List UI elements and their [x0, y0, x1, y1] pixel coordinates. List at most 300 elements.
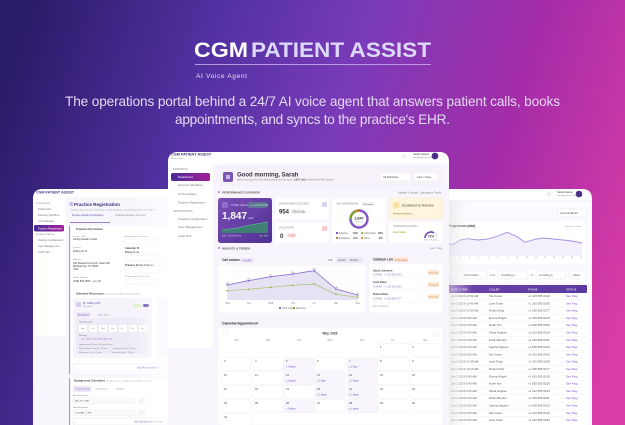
section: practice information: 100 Medical Center Dr, Suite 200 [73, 262, 110, 265]
calendar: appointments: 25 [255, 401, 259, 405]
calendar: appointments: 13 [317, 373, 321, 377]
section: background schedule: Set your hours, regulatory and holiday schedule [106, 380, 153, 382]
line chart: call progression: 5 [469, 257, 471, 259]
sidebar [168, 164, 213, 348]
calendar: appointments: Wed [327, 339, 333, 342]
section: schedule resources: Wed [101, 328, 105, 330]
heading: performance overview [218, 190, 442, 194]
card: total calls: calls [248, 216, 254, 220]
card: callback list: Escalated [429, 272, 439, 274]
table: call log: Jun 2 2026 8:55 AM [451, 404, 477, 408]
calendar: appointments: 6 [317, 359, 319, 363]
table: call log: +1 206 555 0177 [528, 309, 550, 313]
table: call log: STATUS [566, 288, 576, 292]
calendar: appointments: 31 [224, 415, 228, 419]
sidebar: Discover Workflow [178, 183, 204, 187]
card: callback list: Sarah Johnson [373, 268, 393, 272]
line chart: call progression: 12 [535, 257, 538, 259]
card: escalated to humans: Review transfers → [393, 212, 415, 216]
table: call log: Jun 3 2026 9:15 AM [451, 345, 477, 349]
section: schedule resources: Thu [111, 328, 114, 330]
card: callback list [369, 254, 443, 313]
card: appointments booked: 954 [279, 210, 290, 216]
line chart: call progression: 16 [571, 257, 574, 259]
section: schedule resources: Dr. Jeffrey M.D. [83, 301, 101, 305]
line chart: call volume: 274 [246, 279, 251, 281]
table: call log: Robert Diaz [489, 367, 505, 371]
table: call log: +1 628 555 0156 [528, 323, 550, 327]
table: call log: Olivia Hughes [489, 330, 508, 334]
calendar: appointments: 10 [224, 373, 228, 377]
line chart: call volume: 248 [225, 283, 230, 285]
calendar: appointments: 11 [255, 373, 258, 377]
calendar: appointments: ● 2 Appt [349, 366, 358, 368]
table: call log: See Msg [566, 338, 578, 342]
card: appointments booked [275, 198, 329, 219]
line chart: call volume: Sun [356, 302, 361, 305]
table: call log: Jun 2 2026 9:40 AM [451, 382, 477, 386]
page heading: Configure your practice registration, voicemail options and routing for the AI Voice Agent. [70, 208, 156, 212]
section: background schedule: 10:00 AM - 1 PM [75, 412, 91, 414]
section: schedule resources: Working Days [79, 320, 93, 324]
section: practice information: (248) 555-0847 · ext. 10 [73, 279, 101, 283]
title: CGM [194, 39, 248, 62]
line chart: call volume: Call volume [222, 258, 240, 262]
table: call log: See Msg [566, 389, 578, 393]
card: callback list: Liam Patel [373, 280, 387, 284]
calendar: appointments: Sat [423, 339, 427, 342]
calendar: appointments: 19 [286, 387, 290, 391]
donut chart: call outcomes: Information [364, 232, 377, 235]
description: appointments, and syncs to the practice's EHR. [175, 112, 450, 127]
table: call log: Nia Carter [489, 294, 502, 298]
section: background schedule: Save Background Schedule [134, 420, 163, 424]
table: call log: Emma Wright [489, 316, 507, 320]
gauge: human handled: 72% [428, 234, 434, 238]
line chart: call volume: Daily [328, 259, 334, 262]
card: total calls: 1,847 [222, 211, 247, 222]
table: call log: Robert Diaz [489, 309, 505, 313]
table: call log: +1 415 555 0129 [528, 316, 550, 320]
line chart: call volume: 336 [291, 272, 295, 274]
section: practice information: Contact [73, 246, 81, 249]
header bar: CGM PATIENT ASSIST [36, 190, 75, 194]
table: call log: +1 310 555 0183 [528, 301, 550, 305]
calendar: appointments: Sun [234, 339, 239, 342]
line chart: call progression: 15 [562, 257, 565, 259]
page heading [70, 202, 156, 212]
sidebar: Practice Registration [38, 226, 62, 230]
sidebar: Audit Trail [178, 234, 192, 238]
line chart: call volume: 148 [334, 287, 339, 289]
line chart: call volume: Thu [291, 302, 296, 305]
calendar: appointments: 16 [412, 373, 416, 377]
line chart: call progression: 17 [580, 257, 583, 259]
donut chart: call outcomes: 11% [353, 237, 359, 240]
line chart: call volume [218, 254, 366, 313]
table: call log: +1 312 555 0164 [528, 389, 550, 393]
greeting banner: Here's how your AI Voice Agent performed this week. 1,847 calls handled with 98% uptime. [237, 178, 334, 182]
heading: performance overview: PERFORMANCE OVERVIEW [222, 190, 260, 194]
section: schedule resources: Schedule Resources [76, 292, 104, 296]
header bar: Sarah Adams [413, 152, 430, 156]
table: call log: Jun 2 2026 10:35 AM [451, 360, 479, 364]
donut chart: call outcomes: Booking [339, 232, 348, 235]
calendar: appointments: 3 [224, 359, 226, 363]
calendar: appointments: 2 [412, 345, 414, 349]
sidebar: WORKSPACE [173, 168, 188, 171]
donut chart: call outcomes: Total calls [355, 220, 363, 224]
calendar: appointments: ● 8 Appts [286, 366, 297, 368]
sidebar: User Management [178, 225, 203, 229]
user profile [546, 190, 582, 197]
table: call log: +1 669 555 0122 [528, 345, 550, 349]
table: call log: Jun 2 2026 9:32 AM [451, 389, 477, 393]
section: background schedule: Background Schedules [74, 378, 106, 382]
donut chart: call outcomes: Other [364, 237, 370, 240]
donut chart: call outcomes: 1,847 [354, 216, 364, 220]
section: schedule resources: Sun [141, 328, 144, 330]
gauge: human handled [389, 222, 443, 243]
calendar: appointments: 8 [380, 359, 382, 363]
donut chart: call outcomes: 28% [378, 232, 384, 235]
section: practice information: USA [73, 268, 78, 271]
table: call log: See Msg [566, 411, 578, 415]
calendar: appointments: ● 6 Appts [286, 380, 297, 382]
table: call log: +1 669 555 0122 [528, 404, 550, 408]
calendar: appointments: 23 [412, 387, 416, 391]
calendar: appointments: 26 [286, 401, 290, 405]
calendar: appointments: ● 5 Appts [317, 394, 328, 396]
card: total calls: TOTAL CALLS [231, 203, 248, 207]
section: background schedule [69, 378, 175, 425]
line chart: call volume: 362 [312, 269, 317, 271]
sidebar: Practice Registration [178, 200, 206, 204]
line chart: call volume: Monthly [350, 259, 359, 262]
sidebar: Dashboard [178, 175, 193, 179]
section: schedule resources: Mon [81, 328, 85, 330]
section: schedule resources: Tue [91, 328, 94, 330]
card: total calls: Avg. Call Duration [222, 234, 242, 238]
filter bar: mm/dd/yyyy [501, 273, 516, 277]
table: call log: Liam Tolan [489, 301, 503, 305]
table: call log: See Msg [566, 301, 578, 305]
table: call log: Jun 3 2026 9:25 AM [451, 338, 477, 342]
calendar: appointments: 12 [286, 373, 290, 377]
line chart: call progression: 7 [488, 257, 490, 259]
panel: dashboard screen [168, 152, 449, 425]
line chart: call progression: 6 [478, 257, 480, 259]
user profile: admin@practice.com [557, 194, 576, 197]
table: call log: Jun 3 2026 9:40 AM [451, 323, 477, 327]
sidebar [33, 197, 66, 336]
dropdown: current month: Current Month [560, 211, 578, 215]
filter bar [445, 269, 587, 282]
header bar: AI Voice Agent [171, 157, 184, 160]
section: background schedule: Practice Hours [76, 388, 91, 390]
calendar: appointments: 28 [349, 401, 353, 405]
line chart: call volume: 312 [269, 275, 273, 277]
section: schedule resources: Appointment Types (Primary Care) [79, 343, 113, 346]
line chart: call volume: 92 [356, 293, 360, 295]
section: schedule resources [69, 290, 177, 374]
calendar: appointments: ● 3 Appts [349, 380, 360, 382]
step tabs: Practice Details & Scheduling [72, 214, 104, 217]
calendar: appointments: 29 [380, 401, 384, 405]
section: background schedule: Call Reasons [95, 388, 109, 390]
table: call log: +1 415 555 0142 [528, 294, 550, 298]
table: call log: +1 206 555 0177 [528, 367, 550, 371]
card: appointments booked: 52% of calls [292, 210, 306, 214]
calendar: appointments: 7 [349, 359, 351, 363]
card: callback list: Robert Diaz [373, 292, 389, 296]
table: call log: See Msg [566, 418, 578, 422]
calendar: appointments: 30 [412, 401, 416, 405]
table: call log: +1 415 555 0191 [528, 338, 550, 342]
table: call log: Jun 3 2026 10:52 AM [451, 294, 479, 298]
step tabs: Configure Practice Voicemail [115, 214, 146, 217]
card: callback list: CONSID · +1 206-555-0177 [373, 298, 402, 300]
calendar: appointments: Fri [392, 339, 395, 342]
card: callback list: Escalated [429, 296, 439, 298]
heading: insights and trends [218, 246, 443, 250]
calendar: appointments: ● 8 Appts [286, 408, 297, 410]
calendar: appointments: 24 [224, 401, 228, 405]
line chart: call volume: Mon [226, 302, 231, 305]
table: call log: Jun 2 2026 8:20 AM [451, 418, 477, 422]
line chart: call progression: 11 [526, 257, 529, 259]
line chart: call volume: + 18.4% [242, 260, 252, 262]
card: failed calls [275, 223, 329, 243]
calendar: appointments: 14 [349, 373, 353, 377]
sidebar: Practice Configuration [178, 217, 208, 221]
gauge: human handled: Automatable [393, 231, 407, 234]
section: practice information: Billing Email [125, 250, 140, 254]
line chart: call volume: Weekly [338, 259, 347, 262]
header bar: CGM PATIENT ASSIST [171, 152, 212, 156]
gauge: human handled: Rate of Handling [424, 238, 438, 242]
line chart: call progression: 14 [553, 257, 556, 259]
donut chart: call outcomes: 9% [379, 237, 383, 240]
section: schedule resources: Sat [131, 327, 134, 330]
gauge: human handled: HUMAN ESCALATION [393, 225, 418, 228]
table: call log: See Msg [566, 345, 578, 349]
sidebar: AI Knowledge [178, 192, 197, 196]
header bar [33, 189, 175, 199]
section: background schedule: Mon-Fri, 9 AM [75, 400, 89, 402]
section: background schedule: Business Hours [73, 394, 89, 397]
step tabs [70, 214, 146, 223]
table: call log: See Msg [566, 352, 578, 356]
table: call log: See Msg [566, 316, 578, 320]
card: total calls: See Day [259, 234, 269, 238]
card: failed calls: -1.3% [288, 234, 296, 237]
line chart: call volume: Wed [268, 302, 274, 305]
greeting banner: Last 7 days [417, 175, 432, 179]
section: schedule resources: Dr. Jeffrey's Schedule Block ID [82, 338, 112, 340]
heading: performance overview: Updated 2 min ago · Jan practice Trends [398, 192, 442, 194]
table: call log: See Msg [566, 330, 578, 334]
calendar: appointments: 20 [317, 387, 321, 391]
line chart: call volume: Total Calls [282, 307, 294, 310]
line chart: call progression: 8 [497, 257, 499, 259]
card: callback list: CONSID · +1 415-555-0142 [373, 274, 402, 276]
sidebar: Dashboard [38, 207, 51, 211]
line chart: call volume: Bookings [296, 307, 307, 310]
description [65, 94, 560, 127]
filter bar: mm/dd/yyyy [539, 273, 554, 277]
calendar: appointments: Tue [297, 339, 302, 342]
calendar: appointments [218, 318, 443, 425]
table: call log: See Msg [566, 323, 578, 327]
table: call log: See Msg [566, 294, 578, 298]
section: practice information: Calendar ID [125, 246, 140, 250]
table: call log: +1 415 555 0129 [528, 374, 550, 378]
line chart: call volume: Sat [334, 302, 338, 305]
greeting banner [217, 167, 443, 186]
filter bar: From [490, 274, 496, 277]
line chart: call volume: Tue [247, 302, 252, 305]
section: background schedule: Holidays [116, 388, 125, 390]
table: call log: See Msg [566, 374, 578, 378]
calendar: appointments: 17 [224, 387, 228, 391]
table: call log: See Msg [566, 404, 578, 408]
calendar: appointments: 22 [380, 387, 384, 391]
table: call log: Olivia Hughes [489, 389, 508, 393]
table: call log: Liam Tolan [489, 360, 503, 364]
section: background schedule: Saturday Hours [73, 406, 89, 409]
card: total calls: ▲ +12.4% MoM [250, 204, 268, 207]
donut chart: call outcomes: CALL BREAKDOWN [336, 202, 359, 206]
card: callback list: Emma Wright [373, 304, 389, 308]
filter bar: Clear [573, 273, 580, 277]
sidebar: Discover Workflow [38, 213, 60, 217]
calendar: appointments: ● 3 Appts [349, 394, 360, 396]
table: call log: +1 310 555 0183 [528, 360, 550, 364]
calendar: appointments: 9 [412, 359, 414, 363]
table: call log: +1 312 555 0164 [528, 330, 550, 334]
card: callback list: 3 Upcoming [394, 259, 408, 262]
section: schedule resources: Select resources for AI phone scheduling [100, 292, 141, 296]
line chart: call progression: Minutes in scope [565, 225, 582, 228]
table: call log: See Msg [566, 382, 578, 386]
table: call log: Jun 2 2026 9:55 AM [451, 374, 477, 378]
table: call log: +1 415 555 0191 [528, 396, 550, 400]
heading: insights and trends: Last 7 days [430, 247, 443, 250]
greeting banner: Good morning, Sarah [237, 173, 299, 179]
table: call log: Jun 3 2026 9:55 AM [451, 316, 477, 320]
table: call log: Liam Tolan [489, 418, 503, 422]
user profile: Sarah Adams [557, 190, 573, 194]
panel: practice registration screen [33, 189, 177, 425]
donut chart: call outcomes: 52% [353, 232, 359, 235]
table: call log: Sophia Nguyen [489, 345, 509, 349]
sidebar: ADMINISTRATION [173, 210, 193, 213]
title: PATIENT ASSIST [251, 39, 431, 62]
donut chart: call outcomes: Last week [363, 203, 374, 206]
calendar: appointments: Mon [266, 339, 271, 342]
table: call log: Nia Carter [489, 411, 502, 415]
dropdown: current month [558, 209, 587, 217]
calendar: appointments: 4 [255, 359, 257, 363]
table: call log: See Msg [566, 367, 578, 371]
donut chart: call outcomes [332, 198, 386, 243]
section: schedule resources: Availabilities [78, 314, 91, 316]
section: practice information: Medical City, TX 75001 [73, 265, 99, 268]
section: schedule resources: Block Hours [98, 314, 111, 316]
card: escalated to humans: Escalated to humans [402, 204, 434, 208]
table: call log [445, 285, 587, 425]
table: call log: See Msg [566, 360, 578, 364]
section: schedule resources: Follow-up Visit · 15 min [79, 351, 102, 354]
sidebar: WORKSPACE [36, 202, 51, 205]
table: call log: Nia Carter [489, 352, 502, 356]
line chart: call progression: 3 [449, 257, 451, 259]
table: call log: PHONE [528, 288, 538, 292]
calendar: appointments: ● 3 Appts [349, 408, 360, 410]
section: practice information: Practice Email Address [125, 263, 154, 267]
line chart: call progression: 10 [516, 257, 519, 259]
filter bar: To [531, 274, 534, 277]
table: call log: Jun 2 2026 8:40 AM [451, 411, 477, 415]
card: failed calls: CALL DROPS [279, 226, 294, 230]
calendar: appointments: 15 [380, 373, 384, 377]
calendar: appointments: Thu [360, 339, 365, 342]
section: practice information: Email Template Settings [125, 235, 149, 238]
greeting banner: All Practices [383, 175, 399, 179]
table: call log: +1 415 555 0142 [528, 352, 550, 356]
table: call log: Jun 3 2026 8:50 AM [451, 352, 477, 356]
section: schedule resources: Add Resource Block [137, 366, 159, 370]
calendar: appointments: 5 [286, 359, 288, 363]
table: call log: Jun 2 2026 9:20 AM [451, 396, 477, 400]
section: schedule resources: Fri [121, 327, 124, 330]
calendar: appointments: 1 [380, 345, 382, 349]
section: schedule resources: Annual Exam · 30 min [113, 351, 135, 354]
sidebar: Practice Configuration [38, 238, 64, 242]
table: call log: See Msg [566, 396, 578, 400]
table: call log: +1 415 555 0142 [528, 411, 550, 415]
calendar: appointments: Calendar/Appointment [222, 322, 259, 326]
line chart: call progression: Progression (min) [448, 224, 475, 228]
table: call log: DATE & TIME [451, 288, 468, 292]
table: call log: Jun 3 2026 10:45 AM [451, 301, 479, 305]
panel: call log screen [445, 189, 592, 425]
line chart: call volume: Fri [313, 302, 316, 305]
section: practice information: Practice Switch Voicemail [125, 275, 150, 278]
subtitle tag: AI Voice Agent [196, 73, 247, 80]
description: The operations portal behind a 24/7 AI voice agent that answers patient calls, books [65, 94, 560, 109]
section: schedule resources: Family Consult · 45 min [113, 347, 137, 350]
section: practice information: Jeffrey M. D. [73, 249, 88, 253]
line chart: call progression [448, 221, 587, 265]
calendar: appointments: 18 [255, 387, 259, 391]
calendar: appointments: ● 1 Appt [317, 380, 326, 382]
card: failed calls: 0 [280, 234, 284, 240]
section: practice information: Phone Number [73, 276, 88, 279]
card: escalated to humans: ! [396, 203, 397, 208]
heading: insights and trends: INSIGHTS & TRENDS [222, 246, 250, 250]
title [194, 39, 431, 65]
line chart: call progression: 9 [507, 257, 509, 259]
table: call log: Sophia Nguyen [489, 404, 509, 408]
sidebar: User Management [38, 244, 60, 248]
filter bar: All Providers [464, 273, 479, 277]
sidebar: AI Knowledge [38, 219, 55, 223]
sidebar: ADMINISTRATION [36, 233, 55, 236]
header bar [168, 152, 449, 164]
table: call log: Jun 2 2026 10:10 AM [451, 367, 479, 371]
